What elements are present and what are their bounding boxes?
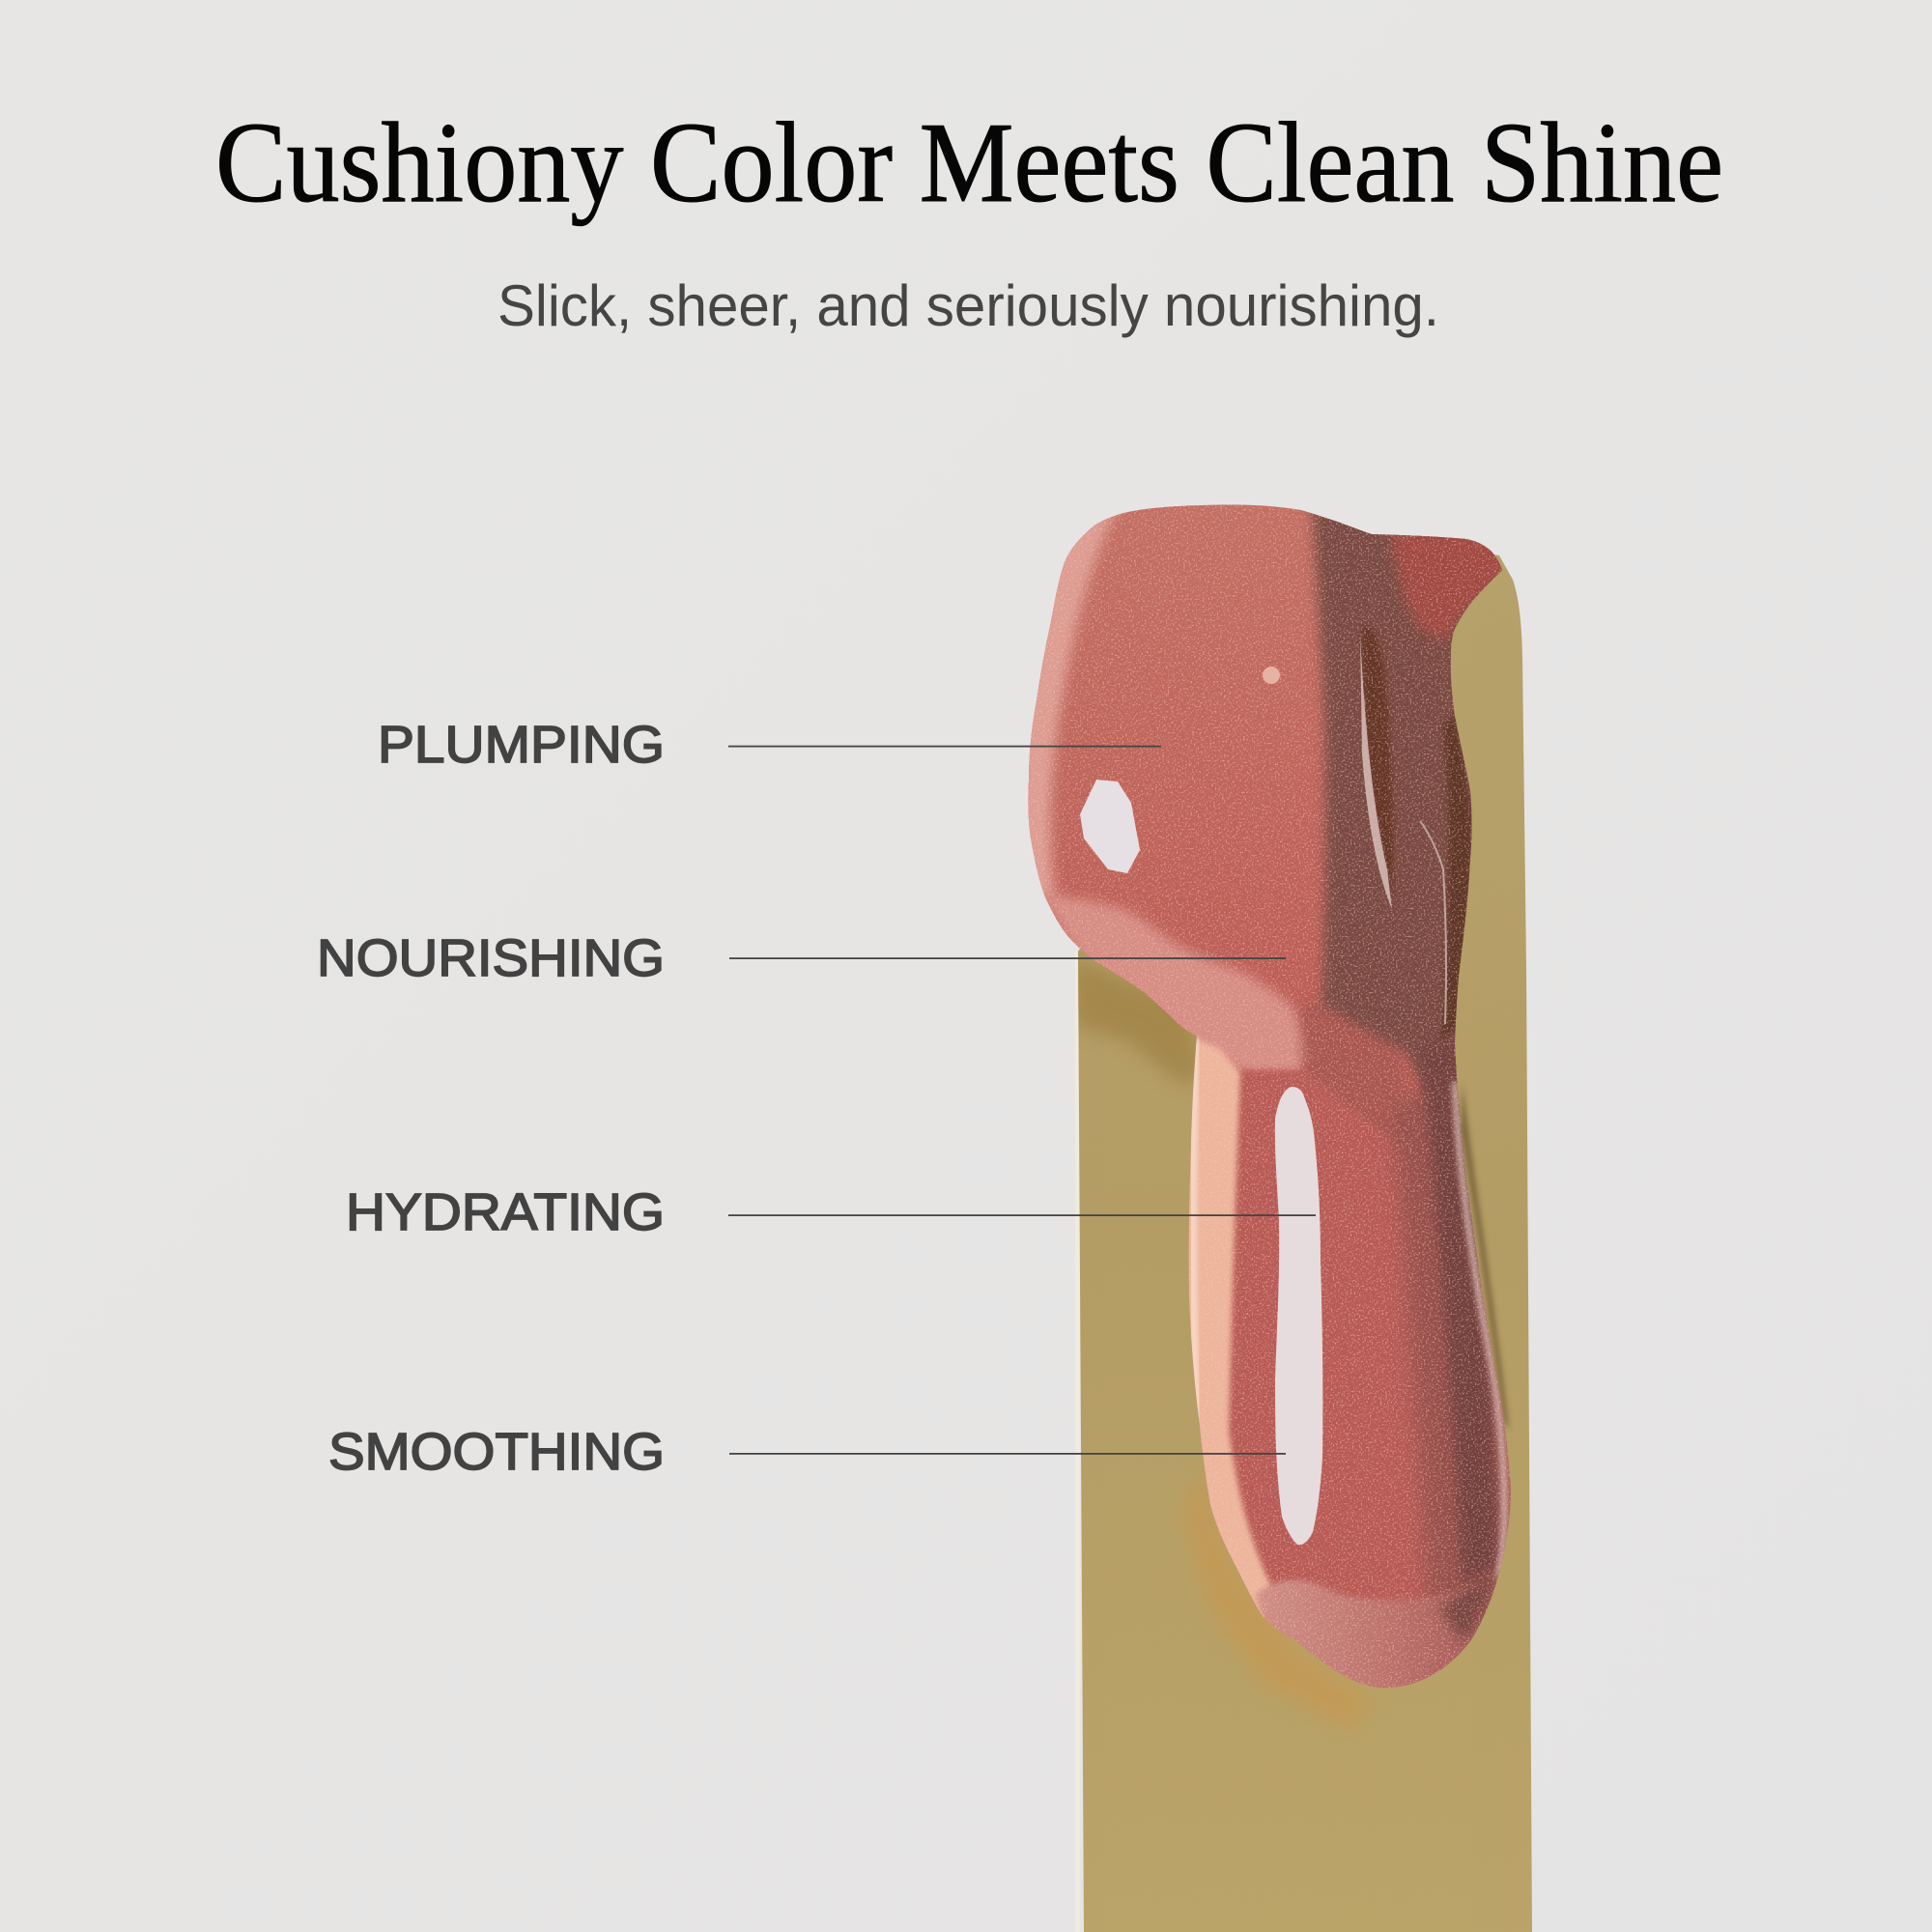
glitter specks: [1024, 502, 1517, 1690]
coral transition at the neck: [1294, 1003, 1408, 1140]
crease highlight: [1420, 821, 1446, 1024]
top highlight on dark band: [1360, 633, 1392, 909]
pale left rim of upper lobe: [1028, 514, 1120, 902]
lower lobe dark right: [1420, 1043, 1499, 1584]
shadow under upper blob on gold: [1072, 956, 1203, 1087]
streak on gold beside blob: [1461, 1082, 1509, 1430]
lower lobe right rim: [1455, 1082, 1504, 1642]
lower lobe mid band: [1391, 1063, 1512, 1604]
gold product strip: [1072, 531, 1536, 1932]
gloss swatch: [1019, 493, 1517, 1700]
dark right edge: [1441, 715, 1472, 1043]
swatch base: [1028, 505, 1511, 1688]
leader line: hydrating: [728, 1214, 1316, 1216]
subtitle: Slick, sheer, and seriously nourishing.: [497, 273, 1439, 338]
small gloss dot: [1263, 667, 1280, 684]
leader line: smoothing: [729, 1453, 1286, 1455]
dark fold near lower right edge: [1439, 1570, 1495, 1642]
label: hydrating: HYDRATING: [346, 1183, 665, 1241]
leader line: nourishing: [729, 957, 1286, 959]
title: Cushiony Color Meets Clean Shine: [215, 99, 1723, 226]
oval highlight upper lobe: [1080, 780, 1140, 873]
peach inner light: [1192, 1038, 1198, 1420]
long highlight lower lobe: [1275, 1087, 1322, 1545]
top right corner of swatch: [1389, 531, 1509, 639]
pale bottom zone: [1256, 1570, 1517, 1700]
peach left band: [1188, 1037, 1286, 1634]
lower pale band of upper lobe: [1038, 891, 1314, 1074]
leader line: plumping: [728, 746, 1161, 748]
lower lobe coral: [1230, 1068, 1415, 1599]
label: smoothing: SMOOTHING: [328, 1423, 665, 1481]
label: plumping: PLUMPING: [378, 716, 665, 774]
orange glow beside lower blob: [1186, 1490, 1365, 1723]
dark side band: [1306, 512, 1502, 1105]
deep brown slit: [1362, 626, 1394, 898]
label: nourishing: NOURISHING: [317, 929, 665, 987]
